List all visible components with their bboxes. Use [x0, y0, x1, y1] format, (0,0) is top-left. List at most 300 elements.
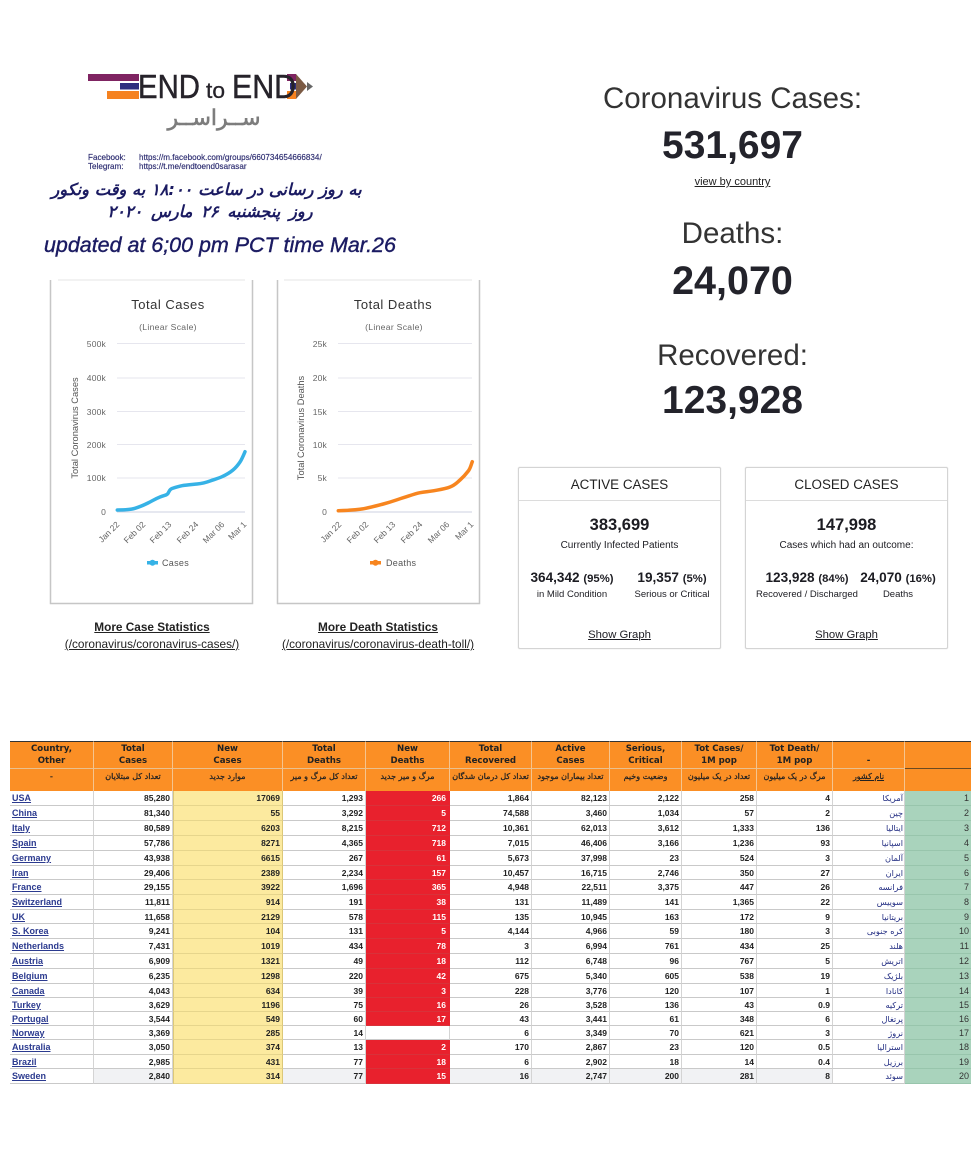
panel: closed cases: [745, 467, 948, 649]
row: S. Korea: 4,966: [586, 926, 607, 936]
row: France: 365: [432, 882, 446, 892]
contact links: [88, 152, 322, 171]
row: China: 2: [825, 808, 830, 818]
row: Portugal: 3,441: [586, 1014, 607, 1024]
row: Germany: 5,673: [508, 853, 529, 863]
row: Portugal: 348: [740, 1014, 754, 1024]
panel: total cases chart: Feb 02: [122, 519, 148, 545]
row: Norway: 14: [354, 1028, 363, 1038]
row: USA: USA: [12, 793, 31, 803]
row: UK: 9: [825, 912, 830, 922]
row: Switzerland: [10, 895, 971, 910]
row: Switzerland: 11,811: [145, 897, 170, 907]
row: S. Korea: کره جنوبی: [867, 926, 903, 936]
table header: English: New: [217, 744, 238, 754]
row: Iran: 27: [821, 868, 830, 878]
row: Turkey: 75: [354, 1000, 363, 1010]
table header: English: Total: [121, 744, 145, 754]
row: Brazil: 18: [437, 1056, 446, 1066]
row: UK: 163: [665, 912, 679, 922]
table header: Persian: تعداد کل درمان شدگان: [452, 772, 529, 781]
row: Australia: استرالیا: [877, 1042, 903, 1052]
row: Portugal: 43: [520, 1014, 529, 1024]
row: Australia: 2,867: [586, 1042, 607, 1052]
panel: total deaths chart: Feb 24: [399, 519, 425, 545]
row: Italy: 3,612: [658, 823, 679, 833]
table header: Persian: مرگ در یک میلیون: [763, 772, 826, 781]
row: France: فرانسه: [878, 882, 903, 892]
row: China: China: [12, 808, 37, 818]
row: Brazil: 0.4: [818, 1056, 830, 1066]
row: Spain: 4: [964, 838, 969, 848]
row: Netherlands: 761: [665, 941, 679, 951]
table header: English: Active: [555, 744, 586, 754]
row: Italy: 6203: [261, 823, 280, 833]
row: Spain: 8271: [261, 838, 280, 848]
row: Sweden: 8: [825, 1071, 830, 1081]
row: Canada: 4,043: [149, 986, 170, 996]
row: Brazil: [10, 1055, 971, 1069]
row: Germany: 43,938: [144, 853, 170, 863]
row: UK: بریتانیا: [882, 912, 903, 922]
link: more death statistics: More Death Statistics: [318, 620, 438, 634]
row: Netherlands: 7,431: [149, 941, 170, 951]
row: China: [10, 806, 971, 821]
row: USA: آمریکا: [883, 793, 903, 803]
row: Italy: 62,013: [581, 823, 607, 833]
row: Canada: 634: [266, 986, 280, 996]
row: Austria: [10, 954, 971, 969]
deaths label: Deaths: [883, 589, 913, 600]
row: Belgium: بلژیک: [884, 971, 903, 981]
number: total cases: 531,697: [662, 124, 803, 167]
panel: total cases chart: 300k: [87, 407, 107, 417]
row: Sweden: 314: [266, 1071, 280, 1081]
table header: English: Recovered: [465, 756, 516, 766]
row: Belgium: 13: [959, 971, 969, 981]
row: Norway: 285: [266, 1028, 280, 1038]
row: Belgium: 5,340: [586, 971, 607, 981]
row: Turkey: 3,629: [149, 1000, 170, 1010]
link: more death statistics: [282, 620, 474, 651]
row: China: 81,340: [144, 808, 170, 818]
row: Turkey: ترکیه: [885, 1000, 903, 1010]
row: Portugal: 549: [266, 1014, 280, 1024]
contact links: https://t.me/endtoend0sarasar: [139, 162, 247, 171]
row: France: 29,155: [144, 882, 170, 892]
row: Norway: نروژ: [888, 1028, 903, 1038]
row: Brazil: 2,902: [586, 1056, 607, 1066]
row: USA: 1,293: [342, 793, 363, 803]
table header: English: Cases: [119, 756, 147, 766]
row: Austria: 1321: [261, 956, 280, 966]
row: Austria: 18: [437, 956, 446, 966]
panel: total deaths chart: Mar 06: [426, 519, 452, 545]
panel: total deaths chart: Jan 22: [318, 519, 344, 544]
row: Norway: 70: [670, 1028, 679, 1038]
row: S. Korea: 10: [959, 926, 969, 936]
row: USA: 17069: [256, 793, 280, 803]
row: Australia: 374: [266, 1042, 280, 1052]
row: France: 22,511: [581, 882, 607, 892]
row: Sweden: Sweden: [12, 1071, 46, 1081]
row: Netherlands: 434: [349, 941, 363, 951]
row: Germany: 267: [349, 853, 363, 863]
row: Belgium: Belgium: [12, 971, 48, 981]
heading: coronavirus cases: Coronavirus Cases:: [603, 82, 862, 115]
row: Netherlands: 1019: [261, 941, 280, 951]
row: China: 1,034: [658, 808, 679, 818]
row: UK: 11,658: [144, 912, 170, 922]
panel: total deaths chart: Total Deaths: [354, 297, 432, 312]
row: Austria: 767: [740, 956, 754, 966]
row: France: France: [12, 882, 42, 892]
row: UK: 9: [964, 912, 969, 922]
panel: total cases chart: Cases: [162, 558, 189, 568]
row: Turkey: 15: [959, 1000, 969, 1010]
row: Sweden: 77: [354, 1071, 363, 1081]
row: UK: 115: [432, 912, 446, 922]
row: Canada: 228: [515, 986, 529, 996]
row: Sweden: سوئد: [885, 1071, 903, 1081]
table header: English: Critical: [628, 756, 663, 766]
row: Portugal: 16: [959, 1014, 969, 1024]
row: USA: 85,280: [144, 793, 170, 803]
table header: English: Serious,: [626, 744, 665, 754]
row: Netherlands: 25: [821, 941, 830, 951]
row: Iran: ایران: [886, 868, 903, 878]
panel: total cases chart: Total Coronavirus Cases: [70, 377, 80, 479]
row: Austria: 6,909: [149, 956, 170, 966]
row: France: 4,948: [508, 882, 529, 892]
panel: total cases chart: Feb 24: [175, 519, 201, 545]
panel: total cases chart: 100k: [87, 473, 107, 483]
mild label: in Mild Condition: [537, 589, 607, 600]
row: Norway: 621: [740, 1028, 754, 1038]
mild count: 364,342 (95%): [530, 570, 614, 585]
row: Switzerland: 141: [665, 897, 679, 907]
row: UK: 10,945: [581, 912, 607, 922]
active cases header: ACTIVE CASES: [571, 477, 668, 492]
row: Iran: 16,715: [581, 868, 607, 878]
row: Belgium: 675: [515, 971, 529, 981]
row: Spain: Spain: [12, 838, 37, 848]
contact links: Telegram:: [88, 162, 124, 171]
logo: End to End: [88, 68, 313, 131]
row: Brazil: 18: [670, 1056, 679, 1066]
row: Australia: [10, 1040, 971, 1055]
row: China: 3,292: [342, 808, 363, 818]
row: Norway: 3,369: [149, 1028, 170, 1038]
row: USA: 258: [740, 793, 754, 803]
row: Iran: 2,234: [342, 868, 363, 878]
row: Sweden: [10, 1069, 971, 1084]
row: China: چین: [889, 808, 903, 818]
row: Turkey: [10, 998, 971, 1012]
row: S. Korea: 180: [740, 926, 754, 936]
row: Turkey: 43: [745, 1000, 754, 1010]
table header: Persian: مرگ و میر جدید: [380, 772, 435, 781]
row: USA: 1,864: [508, 793, 529, 803]
table: country statistics: [10, 741, 971, 1084]
row: Turkey: 26: [520, 1000, 529, 1010]
row: Iran: 157: [432, 868, 446, 878]
row: Portugal: [10, 1012, 971, 1026]
row: Netherlands: [10, 939, 971, 954]
panel: total cases chart: [50, 279, 254, 604]
row: Netherlands: 3: [524, 941, 529, 951]
panel: total deaths chart: 0: [322, 507, 327, 517]
row: Brazil: 14: [745, 1056, 754, 1066]
row: Iran: 2389: [261, 868, 280, 878]
row: Brazil: 77: [354, 1056, 363, 1066]
panel: total deaths chart: (Linear Scale): [365, 322, 423, 332]
panel: total deaths chart: 15k: [313, 407, 328, 417]
row: France: 3,375: [658, 882, 679, 892]
link: more case statistics: More Case Statistics: [94, 620, 210, 634]
row: Netherlands: Netherlands: [12, 941, 64, 951]
row: UK: 578: [349, 912, 363, 922]
row: Norway: [10, 1026, 971, 1040]
row: Sweden: 2,747: [586, 1071, 607, 1081]
row: Sweden: 2,840: [149, 1071, 170, 1081]
row: Canada: 39: [354, 986, 363, 996]
panel: total deaths chart: Total Coronavirus Deaths: [296, 375, 306, 480]
row: France: 3922: [261, 882, 280, 892]
active total: 383,699: [590, 516, 649, 534]
row: Norway: 3,349: [586, 1028, 607, 1038]
row: Portugal: Portugal: [12, 1014, 49, 1024]
row: Italy: 3: [964, 823, 969, 833]
table header: English: Other: [38, 756, 65, 766]
row: Canada: 3,776: [586, 986, 607, 996]
row: S. Korea: 9,241: [149, 926, 170, 936]
row: Turkey: 136: [665, 1000, 679, 1010]
row: France: [10, 880, 971, 895]
row: Sweden: 200: [665, 1071, 679, 1081]
row: China: 74,588: [503, 808, 529, 818]
row: Iran: 29,406: [144, 868, 170, 878]
panel: total cases chart: Mar 1: [226, 519, 249, 542]
panel: total deaths chart: [276, 279, 480, 604]
row: Brazil: 431: [266, 1056, 280, 1066]
active cases header: [519, 468, 720, 501]
row: USA: 1: [964, 793, 969, 803]
table header: Persian: نام کشور: [853, 772, 884, 781]
row: China: 5: [441, 808, 446, 818]
row: Italy: 80,589: [144, 823, 170, 833]
table header: English: Country,: [31, 744, 72, 754]
active caption: Currently Infected Patients: [561, 540, 678, 551]
serious label: Serious or Critical: [635, 589, 709, 600]
row: Switzerland: 38: [437, 897, 446, 907]
row: Sweden: 16: [520, 1071, 529, 1081]
row: Spain: 1,236: [733, 838, 754, 848]
row: Canada: کانادا: [886, 986, 903, 996]
contact links: Facebook:: [88, 152, 126, 162]
table header: English: Total: [479, 744, 502, 754]
row: Spain: 7,015: [508, 838, 529, 848]
row: Norway: 3: [825, 1028, 830, 1038]
row: Spain: [10, 836, 971, 851]
table header: English: [10, 741, 971, 1084]
row: Spain: 46,406: [581, 838, 607, 848]
table header: English: Deaths: [390, 756, 425, 766]
row: Australia: 170: [515, 1042, 529, 1052]
row: S. Korea: 131: [349, 926, 363, 936]
row: Brazil: 19: [959, 1056, 969, 1066]
row: Switzerland: 1,365: [733, 897, 754, 907]
table header: English: 1M pop: [701, 756, 737, 766]
row: Norway: 6: [524, 1028, 529, 1038]
row: Netherlands: 78: [437, 941, 446, 951]
row: S. Korea: S. Korea: [12, 926, 49, 936]
row: Norway: Norway: [12, 1028, 45, 1038]
row: Belgium: 6,235: [149, 971, 170, 981]
row: Switzerland: 131: [515, 897, 529, 907]
row: Portugal: 6: [825, 1014, 830, 1024]
closed cases header: [746, 468, 947, 501]
row: Iran: Iran: [12, 868, 29, 878]
row: Brazil: برزیل: [884, 1056, 903, 1066]
table header: English: Tot Cases/: [694, 744, 744, 754]
row: Austria: 12: [959, 956, 969, 966]
row: Canada: 1: [825, 986, 830, 996]
row: S. Korea: 104: [266, 926, 280, 936]
heading: recovered: Recovered:: [657, 339, 808, 372]
row: UK: 2129: [261, 912, 280, 922]
row: Canada: 120: [665, 986, 679, 996]
row: Switzerland: Switzerland: [12, 897, 62, 907]
row: Austria: 5: [825, 956, 830, 966]
row: Germany: 3: [825, 853, 830, 863]
row: UK: UK: [12, 912, 25, 922]
row: Portugal: پرتغال: [882, 1014, 903, 1024]
panel: total cases chart: 500k: [87, 339, 107, 349]
row: Switzerland: سوییس: [877, 897, 903, 907]
row: China: 57: [745, 808, 754, 818]
table header: English: 1M pop: [777, 756, 812, 766]
table header: English: Cases: [556, 756, 585, 766]
row: Italy: [10, 821, 971, 836]
table header: Persian: تعداد بیماران موجود: [538, 772, 603, 781]
row: Brazil: 2,985: [149, 1056, 170, 1066]
row: Belgium: 42: [437, 971, 446, 981]
row: UK: 135: [515, 912, 529, 922]
row: China: 2: [964, 808, 969, 818]
row: Germany: آلمان: [885, 853, 903, 863]
row: Netherlands: 434: [740, 941, 754, 951]
row: S. Korea: 4,144: [508, 926, 529, 936]
panel: total cases chart: 0: [101, 507, 106, 517]
row: Canada: Canada: [12, 986, 45, 996]
row: Australia: 2: [441, 1042, 446, 1052]
link: more case statistics: (/coronavirus/coronavirus-cases/): [65, 637, 239, 651]
row: Australia: 18: [959, 1042, 969, 1052]
row: Brazil: 6: [524, 1056, 529, 1066]
row: Australia: 3,050: [149, 1042, 170, 1052]
row: Germany: 524: [740, 853, 754, 863]
row: Belgium: [10, 969, 971, 984]
closed cases header: CLOSED CASES: [794, 477, 899, 492]
table header: English: -: [867, 756, 870, 766]
panel: total deaths chart: 25k: [313, 339, 328, 349]
panel: active cases: [518, 467, 721, 649]
row: Austria: اتریش: [881, 956, 903, 966]
row: USA: 4: [825, 793, 830, 803]
row: Iran: 2,746: [658, 868, 679, 878]
row: Netherlands: 6,994: [586, 941, 607, 951]
table header: Persian: وضعیت وخیم: [624, 772, 667, 781]
row: France: 1,696: [342, 882, 363, 892]
row: Italy: 712: [432, 823, 446, 833]
show graph link: Show Graph: [815, 629, 878, 641]
row: USA: 82,123: [581, 793, 607, 803]
row: S. Korea: 59: [670, 926, 679, 936]
panel: total cases chart: 200k: [87, 440, 107, 450]
heading: deaths: Deaths:: [682, 217, 783, 250]
panel: total deaths chart: 20k: [313, 373, 328, 383]
row: France: 7: [964, 882, 969, 892]
table header: Persian: تعداد کل مرگ و میر: [291, 772, 357, 781]
row: Switzerland: 11,489: [581, 897, 607, 907]
row: Canada: 14: [959, 986, 969, 996]
row: Netherlands: 11: [960, 941, 969, 951]
table header: Persian: [10, 769, 971, 791]
row: Italy: ایتالیا: [886, 823, 903, 833]
table header: Persian: موارد جدید: [209, 772, 246, 781]
link: more death statistics: (/coronavirus/coronavirus-death-toll/): [282, 637, 474, 651]
panel: total cases chart: Mar 06: [201, 519, 227, 545]
row: Turkey: 1196: [262, 1000, 280, 1010]
panel: total cases chart: Feb 13: [148, 519, 174, 545]
panel: total cases chart: 400k: [87, 373, 107, 383]
row: Germany: 5: [964, 853, 969, 863]
link: more case statistics: [64, 620, 240, 651]
row: Netherlands: هلند: [889, 941, 903, 951]
row: Switzerland: 22: [821, 897, 830, 907]
row: Turkey: 3,528: [586, 1000, 607, 1010]
row: Italy: Italy: [12, 823, 30, 833]
row: Belgium: 19: [821, 971, 830, 981]
row: Sweden: 20: [959, 1071, 969, 1081]
row: Turkey: 0.9: [818, 1000, 830, 1010]
row: Austria: 96: [670, 956, 679, 966]
link: view by country: view by country: [695, 176, 770, 188]
row: Austria: 112: [515, 956, 529, 966]
Persian update notice line 1: به روز رسانی در ساعت ۱۸:۰۰ به وقت ونکور: [51, 180, 362, 199]
panel: total cases chart: Jan 22: [96, 519, 122, 544]
table header: English: Tot Death/: [770, 744, 819, 754]
row: Australia: 0.5: [818, 1042, 830, 1052]
row: Spain: 4,365: [342, 838, 363, 848]
table header: English: Total: [312, 744, 336, 754]
row: Italy: 1,333: [733, 823, 754, 833]
row: Spain: 718: [432, 838, 446, 848]
row: S. Korea: [10, 924, 971, 939]
contact links: https://m.facebook.com/groups/660734654666834/: [139, 152, 322, 162]
row: China: 3,460: [586, 808, 607, 818]
row: Portugal: 3,544: [149, 1014, 170, 1024]
row: UK: 172: [740, 912, 754, 922]
row: Portugal: 60: [354, 1014, 363, 1024]
row: Italy: 8,215: [342, 823, 363, 833]
row: Turkey: 16: [437, 1000, 446, 1010]
table header: English: New: [397, 744, 418, 754]
row: Brazil: Brazil: [12, 1056, 37, 1066]
row: Iran: [10, 866, 971, 880]
panel: total cases chart: Total Cases: [131, 297, 205, 312]
